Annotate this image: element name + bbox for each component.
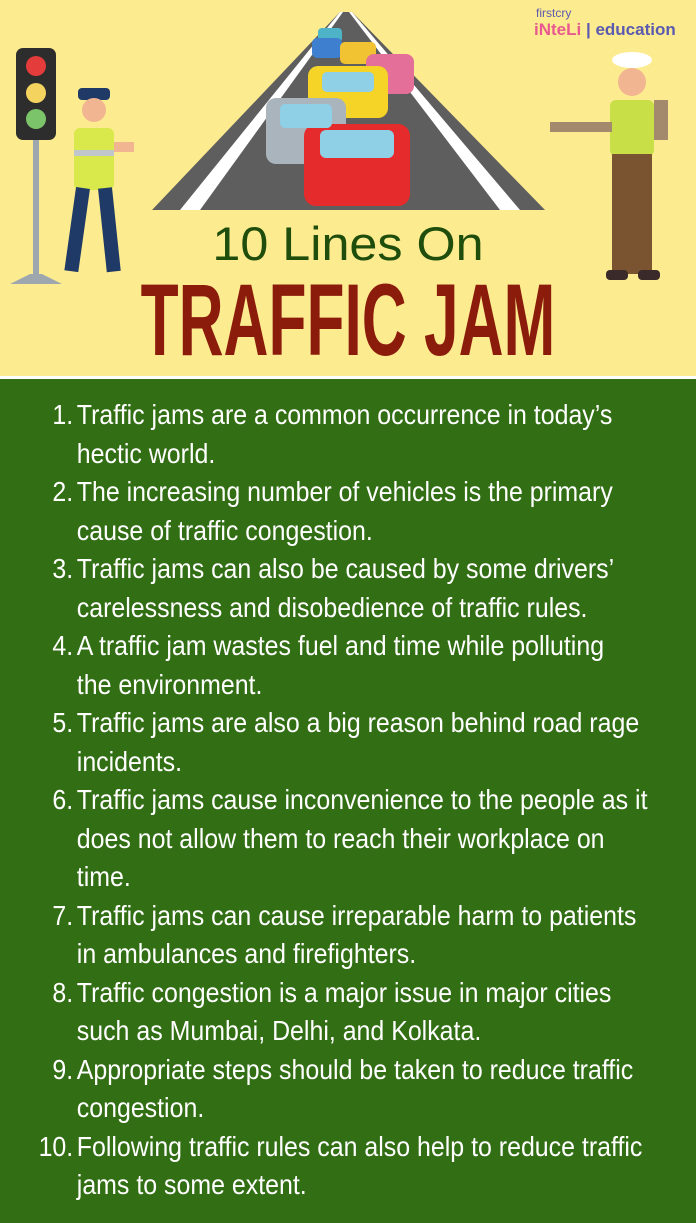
list of ten lines: Traffic jams can cause irreparable harm to patients: [77, 900, 636, 930]
list of ten lines: Traffic jams are a common occurrence in today’s: [77, 399, 612, 430]
list of ten lines: A traffic jam wastes fuel and time while polluting: [77, 630, 604, 661]
logo: iNteLi | education: [534, 20, 676, 39]
list of ten lines: congestion.: [77, 1092, 204, 1123]
list of ten lines: 5.: [52, 707, 73, 738]
list of ten lines: Following traffic rules can also help to reduce traffic: [77, 1130, 642, 1162]
list of ten lines: 9.: [52, 1054, 73, 1084]
list of ten lines: carelessness and disobedience of traffic rules.: [77, 592, 587, 622]
list of ten lines: 6.: [52, 784, 73, 815]
title line 1: 10 Lines On: [212, 217, 484, 270]
icon: policeman right: [550, 52, 668, 280]
list of ten lines: [39, 399, 648, 1200]
list of ten lines: such as Mumbai, Delhi, and Kolkata.: [77, 1015, 481, 1046]
list of ten lines: Traffic jams can also be caused by some drivers’: [77, 553, 614, 584]
logo: firstcry: [536, 6, 571, 20]
list of ten lines: Appropriate steps should be taken to reduce traffic: [77, 1054, 633, 1084]
icon: policeman left: [64, 88, 134, 272]
list of ten lines: 3.: [52, 553, 73, 584]
list of ten lines: time.: [77, 861, 131, 892]
list of ten lines: in ambulances and firefighters.: [77, 938, 416, 969]
header panel: [0, 0, 696, 379]
list of ten lines: Traffic jams are also a big reason behind road rage: [77, 707, 639, 738]
list of ten lines: 8.: [52, 976, 73, 1008]
list of ten lines: cause of traffic congestion.: [77, 514, 373, 546]
list of ten lines: incidents.: [77, 746, 182, 776]
logo: [534, 6, 676, 39]
list of ten lines: 7.: [52, 900, 73, 930]
list of ten lines: 2.: [52, 476, 73, 507]
list of ten lines: the environment.: [77, 668, 262, 700]
list of ten lines: hectic world.: [77, 438, 215, 468]
list of ten lines: jams to some extent.: [77, 1169, 307, 1200]
illustration: road with cars: [152, 12, 545, 210]
list of ten lines: 10.: [39, 1130, 73, 1162]
title line 2: TRAFFIC JAM: [141, 263, 555, 377]
list of ten lines: 4.: [52, 630, 73, 661]
list of ten lines: Traffic congestion is a major issue in major cities: [77, 976, 611, 1008]
list of ten lines: The increasing number of vehicles is the primary: [77, 476, 613, 507]
list of ten lines: Traffic jams cause inconvenience to the people as it: [77, 784, 648, 815]
list of ten lines: does not allow them to reach their workplace on: [77, 822, 605, 854]
list of ten lines: 1.: [52, 399, 73, 430]
icon: traffic light: [10, 48, 62, 284]
